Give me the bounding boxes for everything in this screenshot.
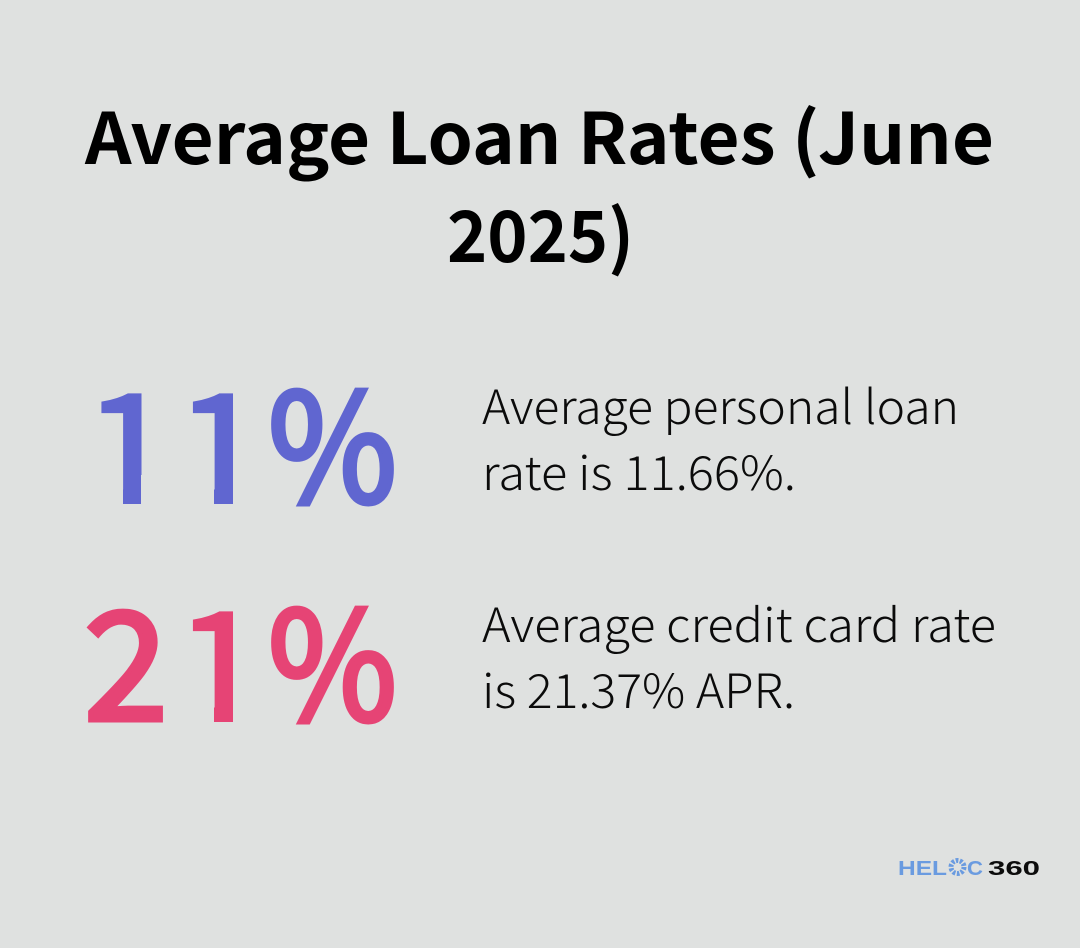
big number: 21%: 1 bbox=[174, 546, 266, 764]
logo: HELOC360: C bbox=[967, 858, 983, 880]
stat: credit card bbox=[84, 546, 996, 764]
stat: personal loan bbox=[83, 328, 959, 546]
stat: credit card: % bbox=[268, 547, 397, 764]
description: personal loan rate: Average personal loan bbox=[482, 369, 959, 438]
big number: 11% bbox=[83, 328, 397, 546]
logo: HELOC360 bbox=[898, 858, 1040, 880]
big number: 11%: % bbox=[268, 329, 397, 546]
description: personal loan rate bbox=[482, 369, 959, 504]
stat: credit card: 2 bbox=[84, 547, 168, 764]
logo: HELOC360: 360 bbox=[988, 858, 1040, 880]
description: credit card rate: Average credit card rate bbox=[482, 587, 996, 656]
title bbox=[84, 83, 994, 283]
description: credit card rate bbox=[482, 587, 996, 722]
big number: 11%: 1 bbox=[83, 328, 175, 546]
icon: spiral O bbox=[951, 860, 964, 874]
logo: HELOC360: HEL bbox=[898, 858, 947, 880]
title: Average Loan Rates (June bbox=[84, 83, 994, 185]
description: credit card rate: is 21.37% APR. bbox=[482, 653, 795, 722]
description: personal loan rate: rate is 11.66%. bbox=[482, 435, 796, 504]
title: 2025) bbox=[447, 181, 634, 283]
big number: 11%: 1 bbox=[174, 328, 266, 546]
